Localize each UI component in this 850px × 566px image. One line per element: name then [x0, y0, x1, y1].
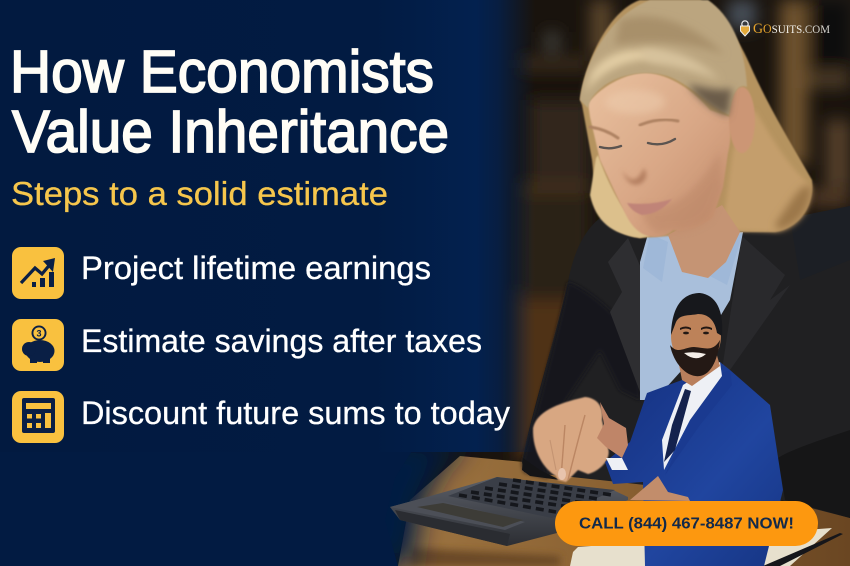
lapel: [665, 370, 732, 475]
step 2: estimate savings after taxes: Estimate savings after taxes: [81, 323, 482, 359]
cuff: [606, 458, 628, 470]
beard: [670, 340, 720, 376]
woman: [522, 0, 850, 518]
step 1: project lifetime earnings: [12, 247, 431, 299]
neck: [668, 205, 740, 278]
step 1: project lifetime earnings: Project lifetime earnings: [81, 250, 431, 286]
hair back: [580, 0, 812, 238]
title: Value Inheritance: [12, 98, 449, 165]
eyes and brows: [590, 120, 678, 148]
head: [671, 305, 721, 367]
shirt: [640, 232, 743, 400]
logo: GoSuits.com: GOSUITS.COM: [753, 21, 830, 37]
hair top: [580, 0, 747, 115]
hair highlight strands: [584, 50, 670, 95]
neck: [677, 352, 720, 386]
step 3: discount future sums to today: Discount future sums to today: [81, 395, 511, 431]
blazer: [522, 206, 850, 518]
smile: [684, 352, 706, 358]
table front shadow: [410, 548, 560, 566]
suit: [605, 362, 783, 566]
sleeve under hand: [522, 458, 560, 480]
table: [398, 456, 850, 566]
subtitle: Steps to a solid estimate: [11, 175, 388, 212]
calculator: [390, 477, 628, 546]
icon: piggy bank with coin: [12, 319, 64, 371]
tie: [664, 389, 691, 462]
title: [10, 38, 449, 165]
man in blue suit: [597, 293, 783, 566]
face shading: [640, 150, 722, 232]
hair shadow by ear: [688, 84, 732, 116]
shirt: [662, 362, 722, 470]
lower hand: [630, 476, 690, 501]
nose: [622, 168, 646, 185]
raised hand: [597, 402, 628, 458]
button: call now: CALL (844) 467-8487 NOW!: [579, 516, 794, 532]
forehead highlight: [605, 90, 665, 114]
left navy fade panel: [0, 0, 535, 566]
ear: [729, 87, 755, 153]
step 3: discount future sums to today: [12, 391, 511, 443]
icon: rising chart: [12, 247, 64, 299]
button: call now: [555, 501, 818, 546]
calculator keys: [459, 480, 612, 512]
step 2: estimate savings after taxes: [12, 319, 482, 371]
notebook and pen: [570, 528, 843, 566]
hair right lower strands: [722, 110, 811, 232]
hair: [671, 293, 722, 336]
icon: calculator: [12, 391, 64, 443]
icon: shield lock: [740, 21, 750, 36]
hand over calculator: [533, 397, 609, 482]
face: [588, 73, 731, 237]
title: How Economists: [10, 38, 434, 105]
lips: [627, 199, 672, 215]
hair left lower strands: [590, 155, 650, 238]
brows and eyes: [680, 326, 712, 334]
icon: piggy bank with coin: 3: [36, 328, 42, 338]
